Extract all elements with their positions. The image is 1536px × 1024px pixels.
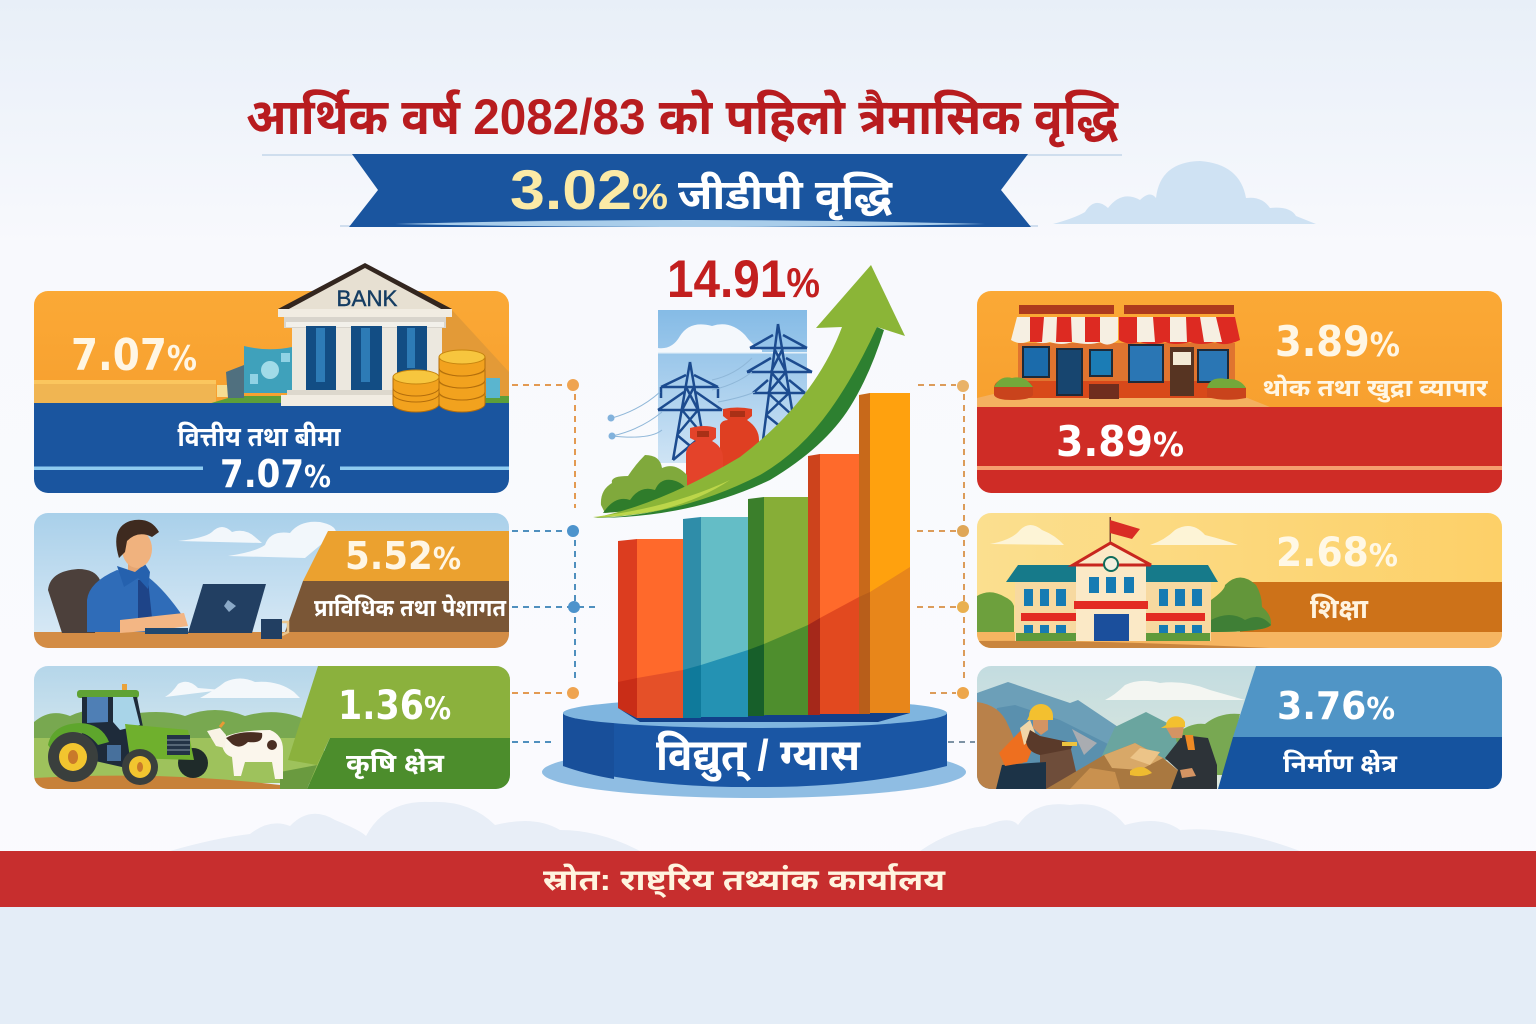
label: थोक तथा खुद्रा व्यापार (1262, 374, 1488, 403)
icon: school (1006, 517, 1218, 641)
percentage: 5.52% (345, 534, 461, 578)
arrow: growth (593, 265, 905, 518)
pedestal (542, 698, 966, 798)
icon: workers (996, 704, 1217, 789)
icon: bank with money and coins (217, 263, 500, 412)
panel: finance and insurance (34, 263, 509, 496)
clouds above source bar (170, 802, 1300, 851)
source bar (0, 851, 1536, 907)
title: आर्थिक वर्ष 2082/83 को पहिलो त्रैमासिक वृद्धि (246, 89, 1119, 148)
decorative cloud top right (1053, 161, 1316, 224)
percentage lower: 7.07% (220, 452, 331, 496)
panel: wholesale and retail trade (977, 291, 1502, 493)
label: निर्माण क्षेत्र (1283, 749, 1398, 778)
connector lines left (512, 379, 597, 742)
ribbon banner: GDP growth: जीडीपी वृद्धि (678, 171, 893, 221)
label: कृषि क्षेत्र (346, 748, 445, 779)
percentage: 7.07% (71, 330, 197, 381)
connector lines right (917, 380, 975, 742)
panel: technical and professional (34, 513, 509, 648)
label: वित्तीय तथा बीमा (178, 422, 341, 452)
label: प्राविधिक तथा पेशागत (314, 594, 507, 622)
ribbon banner: GDP growth: 3.02 (510, 158, 632, 221)
value 14.91%: 14.91% (667, 250, 820, 309)
illustration: pylons and gas cylinders (601, 310, 812, 513)
ribbon banner: GDP growth (262, 154, 1122, 227)
icon: man with laptop (48, 520, 288, 639)
icon: cow (207, 722, 283, 779)
bar chart (618, 393, 910, 718)
percentage: 3.76% (1277, 684, 1395, 728)
source bar: स्रोत: राष्ट्रिय तथ्यांक कार्यालय (543, 863, 946, 898)
panel: education (977, 513, 1502, 648)
icon: shops (994, 305, 1246, 400)
panel: agriculture (34, 666, 510, 789)
ribbon banner: GDP growth: % (632, 176, 668, 217)
icon: tractor (48, 684, 208, 785)
icon: bank with money and coins: BANK (336, 286, 398, 311)
pedestal: विद्युत् / ग्यास (656, 730, 861, 782)
percentage: 2.68% (1276, 530, 1398, 576)
label: शिक्षा (1310, 594, 1369, 624)
percentage lower: 3.89% (1056, 417, 1184, 466)
panel: construction (977, 666, 1502, 789)
percentage: 1.36% (338, 683, 451, 729)
percentage upper: 3.89% (1275, 317, 1400, 366)
central chart: electricity and gas (542, 250, 966, 798)
